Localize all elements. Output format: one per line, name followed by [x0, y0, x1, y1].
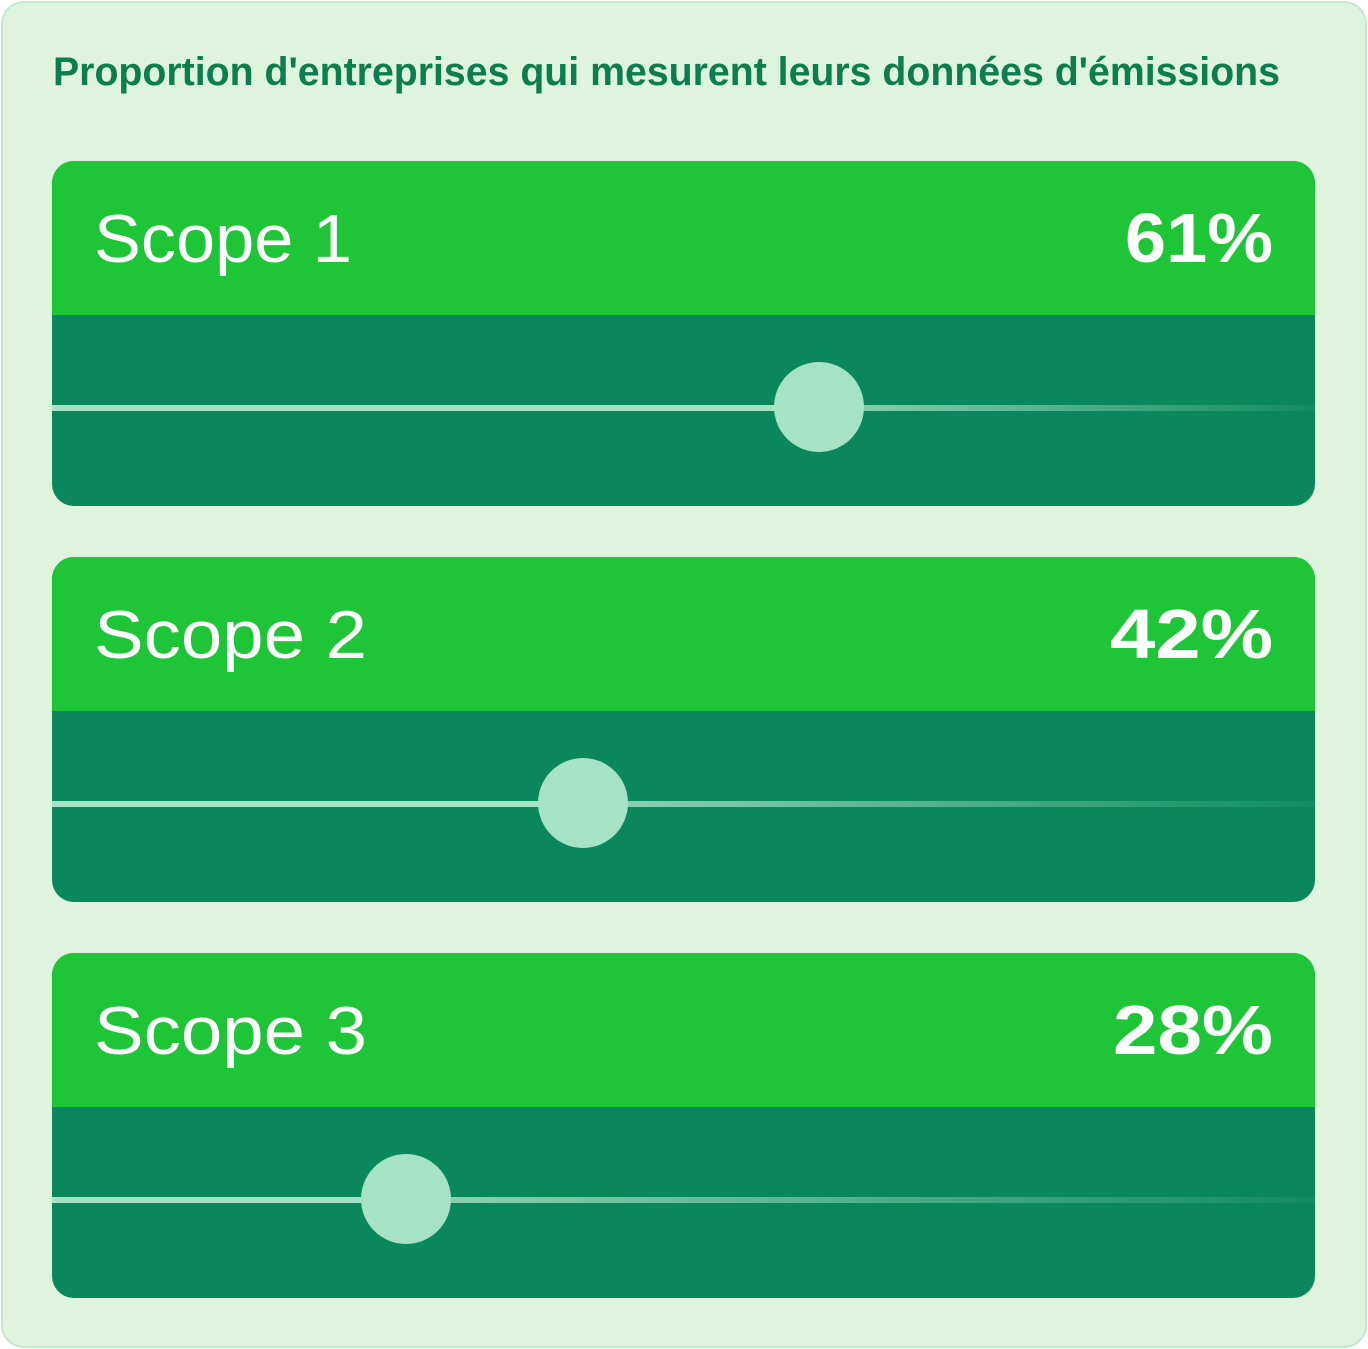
- card: Scope 2: [52, 557, 1315, 902]
- slider: 42%: [52, 758, 1315, 848]
- title: Proportion d'entreprises qui mesurent leurs données d'émissions: [53, 50, 1280, 94]
- value: 61%: 61%: [1125, 199, 1273, 277]
- card: Scope 3: [52, 953, 1315, 1298]
- slider: 28%: [52, 1154, 1315, 1244]
- slider: 61%: [52, 362, 1315, 452]
- label: Scope 1: Scope 1: [94, 201, 352, 277]
- label: Scope 3: Scope 3: [94, 993, 367, 1069]
- card: Scope 1: [52, 161, 1315, 506]
- value: 42%: 42%: [1110, 595, 1273, 673]
- value: 28%: 28%: [1113, 991, 1273, 1069]
- label: Scope 2: Scope 2: [94, 597, 367, 673]
